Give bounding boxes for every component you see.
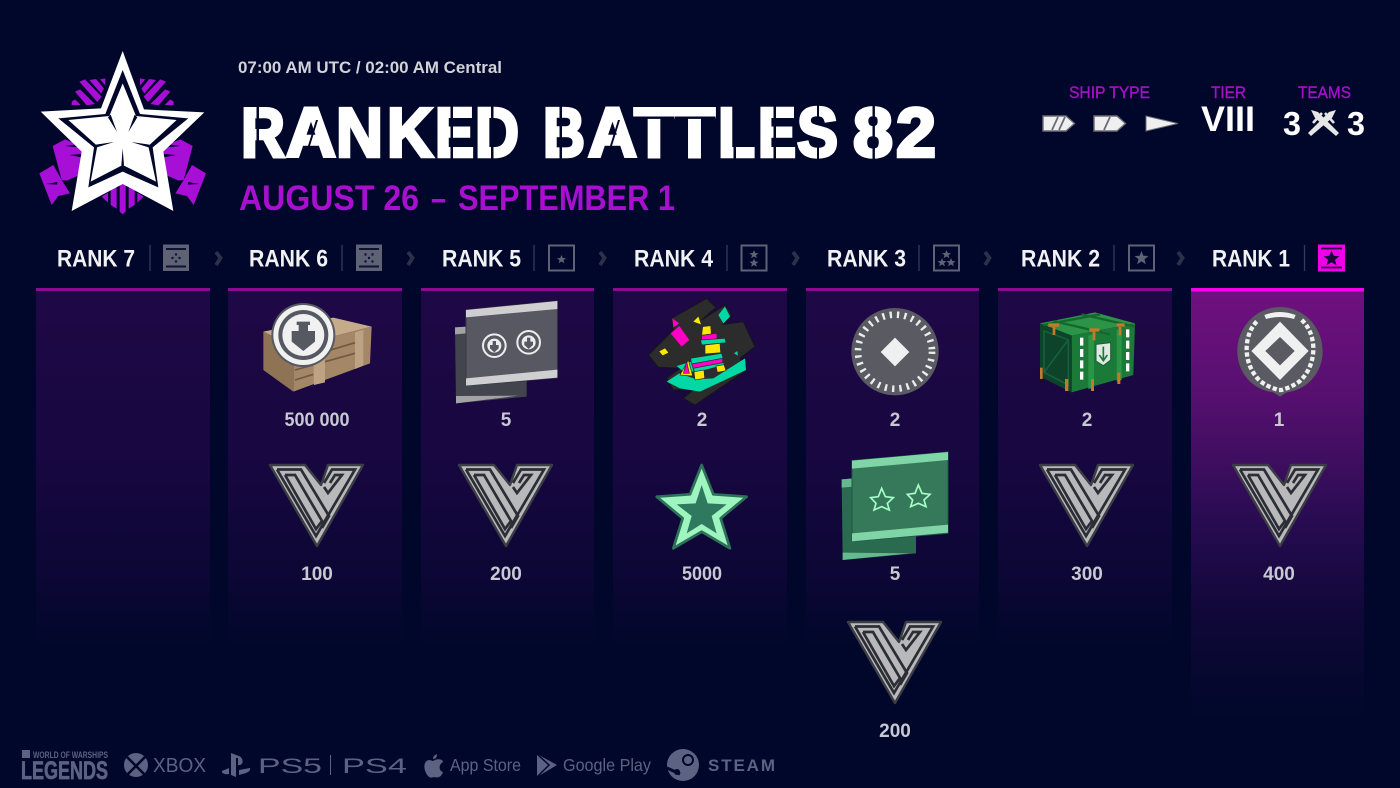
- battle info: tier: VIII: [1201, 100, 1255, 139]
- reward value: 200: [879, 721, 911, 742]
- title: N: [336, 94, 383, 172]
- icon: rank 2 insignia: [1129, 246, 1154, 270]
- column header: rank 2: RANK 2: [1021, 246, 1100, 272]
- column header: rank 4: RANK 4: [634, 246, 714, 272]
- title: T: [674, 94, 715, 172]
- icon: ship type cruiser: [1043, 116, 1074, 131]
- title: [241, 94, 936, 172]
- panel: rank 7: [36, 288, 210, 650]
- icon: grey signal flags: [455, 301, 557, 403]
- logo: app store: App Store: [450, 755, 521, 775]
- column header: rank 2: [1021, 245, 1154, 272]
- date line: –: [431, 179, 446, 218]
- title: R: [241, 94, 285, 172]
- reward value: 500 000: [284, 410, 350, 431]
- time line: 07:00 AM UTC / 02:00 AM Central: [238, 59, 502, 77]
- panel: rank 3: [806, 288, 979, 742]
- icon: points chevron: [270, 465, 363, 546]
- arrow: [793, 252, 798, 265]
- title: L: [718, 94, 755, 172]
- reward value: 2: [890, 410, 900, 431]
- battle info: tier: [1201, 83, 1255, 139]
- icon: rank 6 insignia: [356, 244, 382, 271]
- reward value: 400: [1263, 564, 1295, 585]
- reward value: 100: [301, 564, 333, 585]
- footer: platform logos: [21, 749, 775, 785]
- logo: ranked star emblem: [39, 51, 206, 214]
- title: E: [435, 94, 474, 172]
- icon: rank 4 insignia: [742, 246, 766, 270]
- battle info: teams: [1283, 83, 1365, 142]
- title: 8: [853, 94, 893, 172]
- column header: rank 3: RANK 3: [827, 246, 906, 272]
- reward value: 5: [890, 564, 901, 585]
- panel: rank 6: [228, 288, 402, 650]
- column header: rank 7: RANK 7: [57, 246, 135, 272]
- arrow: [600, 252, 604, 265]
- battle info: teams: 3: [1347, 105, 1365, 142]
- logo: world of warships legends: WORLD OF WARSHIPS: [33, 750, 108, 760]
- reward value: 2: [697, 410, 707, 431]
- column header: rank 6: RANK 6: [249, 246, 328, 272]
- panel: rank 4: [613, 288, 787, 650]
- panel: rank 2: [998, 288, 1172, 650]
- date line: AUGUST 26: [239, 179, 419, 218]
- arrow: [985, 252, 990, 265]
- reward value: 200: [490, 564, 522, 585]
- icon: rank 5 insignia: [549, 246, 574, 270]
- icon: pinata camouflage: [648, 298, 755, 405]
- icon: green crate: [1040, 312, 1135, 392]
- date line: SEPTEMBER 1: [458, 179, 675, 218]
- logo: playstation 5 and 4: [222, 753, 408, 778]
- logo: google play: Google Play: [563, 755, 651, 775]
- logo: world of warships legends: [21, 750, 108, 785]
- column header: rank 7: [57, 244, 189, 272]
- logo: world of warships legends: LEGENDS: [21, 757, 108, 785]
- reward value: 300: [1071, 564, 1103, 585]
- title: T: [634, 94, 674, 172]
- reward value: 2: [1082, 410, 1092, 431]
- arrow: [1178, 252, 1182, 265]
- logo: steam: [667, 749, 775, 781]
- column header: rank 1: RANK 1: [1212, 246, 1290, 272]
- icon: points chevron: [1233, 465, 1326, 546]
- battle info: teams: TEAMS: [1298, 83, 1351, 102]
- date line: [239, 179, 675, 218]
- reward value: 5: [501, 410, 512, 431]
- logo: playstation 5 and 4: PS4: [342, 755, 408, 778]
- icon: wooden crate with credits: [263, 303, 372, 392]
- icon: points chevron: [1040, 465, 1133, 546]
- arrow: [408, 252, 412, 265]
- icon: points chevron: [848, 622, 941, 703]
- title: B: [543, 94, 585, 172]
- title: A: [588, 94, 637, 172]
- title: K: [387, 94, 433, 172]
- icon: laurel diamond medal: [1237, 307, 1323, 397]
- column header: rank 6: [249, 244, 382, 272]
- icon: rank 3 insignia: [934, 246, 959, 270]
- title: 2: [896, 94, 936, 172]
- icon: diamond medal: [851, 308, 939, 395]
- column header: rank 3: [827, 245, 959, 272]
- battle info: ship type: [1043, 83, 1178, 131]
- logo: app store: [424, 754, 521, 778]
- panel: rank 1: [1191, 288, 1364, 723]
- column header: rank 4: [634, 245, 766, 272]
- battle info: ship type: SHIP TYPE: [1069, 83, 1150, 102]
- icon: green star: [657, 465, 747, 548]
- icon: crossed swords: [1308, 110, 1339, 136]
- title: A: [286, 94, 336, 172]
- title: S: [797, 94, 838, 172]
- logo: steam: STEAM: [708, 756, 775, 775]
- icon: points chevron: [459, 465, 552, 546]
- battle info: teams: 3: [1283, 105, 1301, 142]
- title: D: [475, 94, 519, 172]
- logo: xbox: XBOX: [153, 755, 206, 777]
- icon: rank 7 insignia: [163, 244, 189, 271]
- arrow: [216, 252, 220, 265]
- icon: ship type carrier: [1146, 116, 1178, 131]
- reward value: 5000: [682, 564, 722, 585]
- icon: green signal flags: [842, 452, 948, 560]
- logo: xbox: [124, 753, 206, 777]
- panel: rank 5: [421, 288, 594, 650]
- icon: rank 1 insignia: [1318, 244, 1345, 272]
- logo: playstation 5 and 4: PS5: [258, 755, 322, 778]
- column header: rank 5: RANK 5: [442, 246, 521, 272]
- column header: rank 1: [1212, 244, 1345, 272]
- logo: google play: [537, 754, 651, 777]
- reward value: 1: [1274, 410, 1285, 431]
- battle info: tier: TIER: [1211, 83, 1246, 102]
- title: E: [758, 94, 796, 172]
- icon: ship type destroyer: [1094, 116, 1126, 131]
- column header: rank 5: [442, 245, 574, 272]
